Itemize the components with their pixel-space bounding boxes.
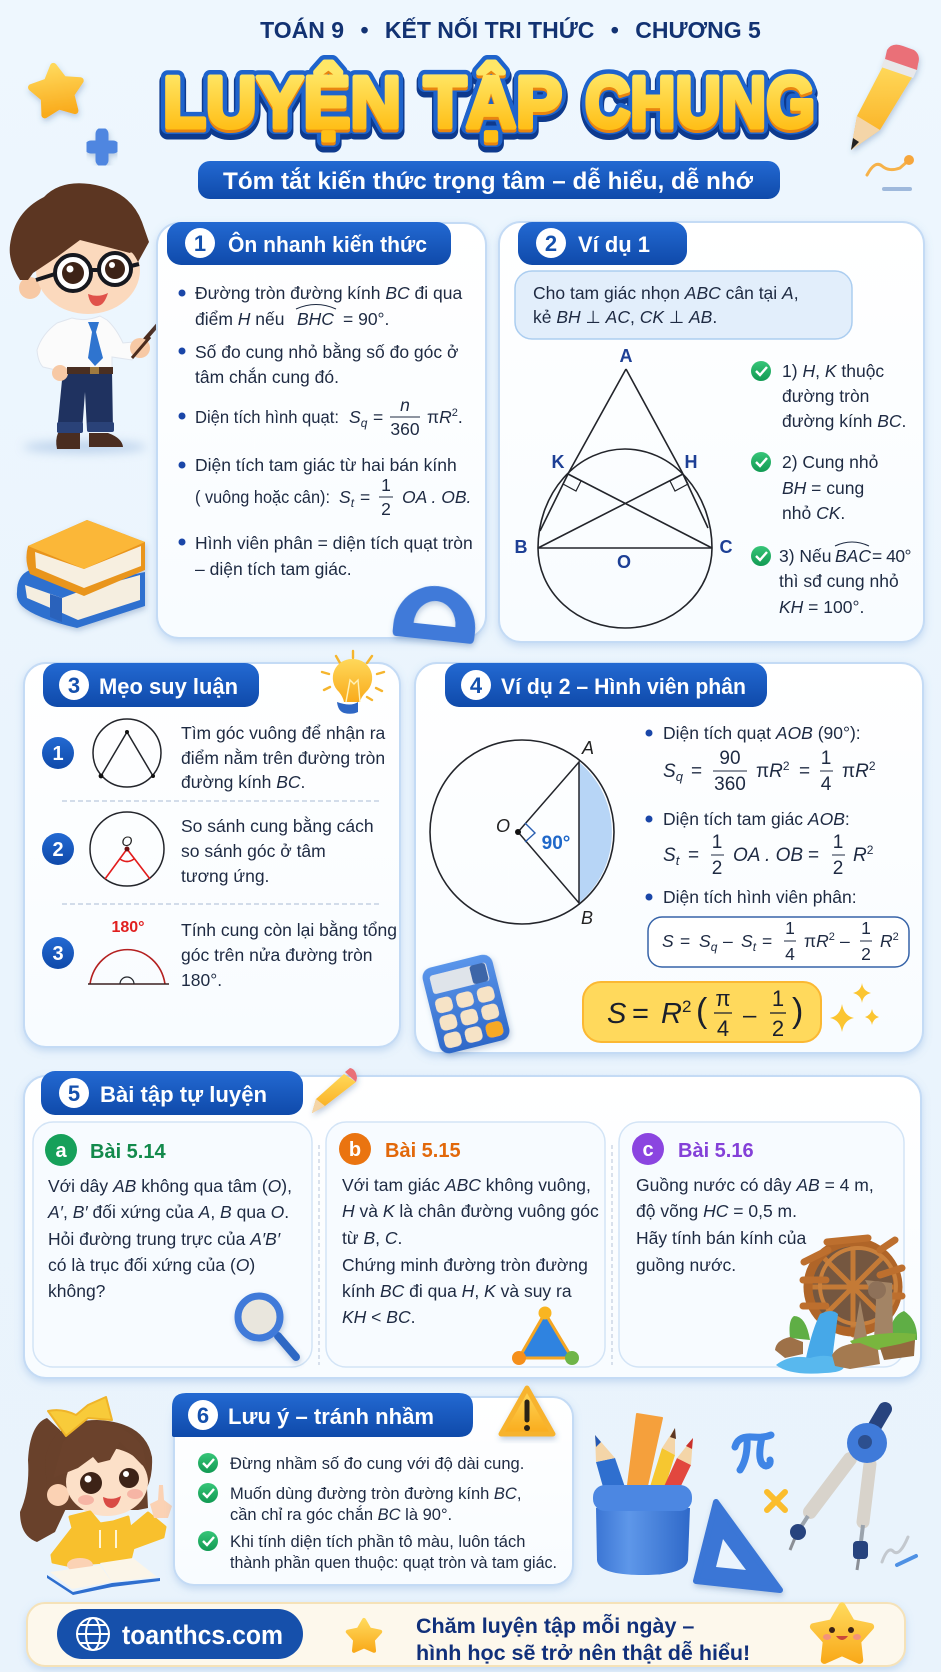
formula list: segment area: 1 [833, 832, 843, 853]
tip 1 [42, 719, 386, 792]
heading 3 [43, 663, 259, 707]
formula box: – [723, 931, 733, 951]
checklist: common mistakes: Đừng nhầm số đo cung với độ dài cung. [230, 1455, 524, 1473]
bullet list: knowledge: – diện tích tam giác. [195, 559, 352, 579]
exercise a: Bài 5.14: có là trục đối xứng của (O) [48, 1255, 255, 1275]
icon: times symbol [767, 1492, 785, 1510]
bullet list: knowledge: Đường tròn đường kính BC đi qua [195, 283, 462, 303]
formula box: S [699, 931, 711, 951]
main title: LUYỆN TẬP CHUNG: TẬP [424, 62, 562, 143]
tagline pill [198, 161, 780, 199]
formula box: 4 [785, 944, 795, 964]
bullet list: knowledge: n [400, 395, 410, 415]
checklist: example 1: thì sđ cung nhỏ [779, 571, 899, 591]
tip 3: 180°. [181, 970, 222, 990]
website badge: toanthcs.com [122, 1620, 283, 1650]
slogan: Chăm luyện tập mỗi ngày – [416, 1613, 694, 1638]
highlighted result formula: ( [696, 992, 708, 1030]
geometry figure: circular segment [430, 738, 614, 928]
tip 3: góc trên nửa đường tròn [181, 945, 373, 965]
exercise b: Bài 5.15: Chứng minh đường tròn đường [342, 1255, 588, 1275]
panel 1: Ôn nhanh kiến thức [157, 222, 486, 638]
main title: LUYỆN TẬP CHUNG: TẬP [424, 66, 562, 147]
tagline pill: Tóm tắt kiến thức trọng tâm – dễ hiểu, dễ nhớ [223, 167, 754, 195]
bullet list: knowledge: 2 [452, 407, 458, 419]
illustration: book stack [17, 520, 145, 628]
formula list: segment area: = [691, 761, 702, 782]
exercise c: Bài 5.16: Guồng nước có dây AB = 4 m, [636, 1175, 874, 1195]
tip 2: so sánh góc ở tâm [181, 841, 326, 861]
icon: calculator [420, 953, 512, 1055]
panel 6: Lưu ý – tránh nhầm [172, 1393, 573, 1585]
formula list: segment area: t [676, 853, 681, 868]
exercise c: Bài 5.16: Bài 5.16 [678, 1140, 754, 1162]
exercise a: Bài 5.14: Với dây AB không qua tâm (O), [48, 1176, 292, 1196]
main title: LUYỆN TẬP CHUNG: LUYỆN [163, 65, 401, 146]
main title: LUYỆN TẬP CHUNG: CHUNG [585, 67, 815, 147]
bullet list: knowledge: S [349, 407, 361, 427]
formula list: segment area: πR [756, 761, 783, 782]
geometry figure: circular segment: A [581, 738, 594, 758]
heading 4: 4 [470, 673, 483, 698]
formula list: segment area [646, 723, 876, 907]
icon: magnifier [238, 1296, 296, 1357]
tip 3: 3 [52, 943, 64, 965]
formula list: segment area: 2 [869, 759, 876, 773]
bullet list: knowledge: Hình viên phân = diện tích quạt tròn [195, 533, 473, 553]
bullet list: knowledge: S [339, 487, 351, 507]
main title: LUYỆN TẬP CHUNG: CHUNG [585, 63, 815, 143]
checklist: common mistakes: cần chỉ ra góc chắn BC là 90°. [230, 1505, 452, 1524]
main title: LUYỆN TẬP CHUNG: LUYỆN [163, 66, 401, 147]
formula box: – [840, 931, 850, 951]
bullet list: knowledge: 360 [390, 419, 420, 439]
exercise a: Bài 5.14: a [55, 1140, 67, 1162]
checklist: common mistakes: Muốn dùng đường tròn đường kính BC, [230, 1485, 521, 1503]
formula list: segment area: 360 [714, 774, 746, 795]
main title: LUYỆN TẬP CHUNG: TẬP [424, 62, 562, 143]
website badge [57, 1609, 303, 1659]
exercise b: Bài 5.15: b [349, 1139, 361, 1161]
geometry figure: triangle ABC in circle: O [617, 552, 631, 572]
checklist: common mistakes [198, 1453, 557, 1572]
footer banner [27, 1603, 905, 1666]
icon: small pencil [312, 1068, 357, 1113]
illustration: boy teacher with pointer [10, 183, 175, 453]
icon: plus [91, 134, 113, 160]
formula list: segment area: 2 [712, 858, 722, 879]
formula list: segment area: R [853, 845, 867, 866]
checklist: example 1: nhỏ CK. [782, 503, 845, 523]
formula box: πR [804, 931, 829, 951]
main title: LUYỆN TẬP CHUNG: LUYỆN [163, 62, 401, 143]
icon: star top left [29, 63, 84, 116]
highlighted result formula: 1 [772, 986, 784, 1011]
formula box: 1 [861, 918, 871, 938]
exercise b: Bài 5.15: Với tam giác ABC không vuông, [342, 1175, 591, 1195]
formula box: 2 [829, 931, 835, 943]
exercise a: Bài 5.14: A′, B′ đối xứng của A, B qua O. [47, 1202, 289, 1222]
bullet list: knowledge: OA . OB. [402, 487, 471, 507]
exercise c: Bài 5.16: c [642, 1139, 654, 1161]
formula list: segment area: 2 [867, 843, 874, 857]
main title: LUYỆN TẬP CHUNG: CHUNG [585, 63, 815, 143]
formula box: 2 [893, 931, 899, 943]
icon: star [348, 1620, 380, 1651]
formula box: = [762, 931, 772, 951]
tip 2 [42, 812, 374, 886]
highlighted result formula: 2 [682, 997, 691, 1016]
heading 2: Ví dụ 1 [578, 232, 650, 257]
icon: compass [790, 1409, 887, 1570]
formula list: segment area: 1 [821, 748, 831, 769]
panel 3: Mẹo suy luận [24, 663, 400, 1047]
icon: warning triangle [501, 1388, 553, 1434]
exercise b: Bài 5.15: kính BC đi qua H, K và suy ra [342, 1281, 572, 1301]
bullet list: knowledge: πR [427, 407, 452, 427]
checklist: example 1: BAC [835, 546, 871, 566]
checklist: example 1: BH = cung [782, 478, 864, 498]
tip 2: 2 [52, 839, 64, 861]
icon: squiggle top right [867, 155, 914, 189]
highlighted result formula: ) [792, 992, 803, 1030]
bullet list: knowledge: . [458, 407, 463, 427]
icon: triangle with dots [512, 1306, 579, 1365]
checklist: example 1: = 40° [872, 546, 911, 566]
tip 1: điểm nằm trên đường tròn [181, 747, 385, 768]
bullet list: knowledge: = [373, 407, 383, 427]
bullet list: knowledge [178, 283, 473, 579]
main title: LUYỆN TẬP CHUNG: LUYỆN [163, 62, 401, 143]
tip 1: 1 [52, 743, 64, 765]
bullet list: knowledge: 2 [381, 499, 391, 519]
highlighted result formula: = [632, 998, 649, 1030]
bullet list: knowledge: t [351, 496, 355, 510]
formula list: segment area: 2 [833, 858, 843, 879]
formula box: R [880, 931, 893, 951]
checklist: common mistakes: thành phần quen thuộc: quạt tròn và tam giác. [230, 1554, 557, 1572]
geometry figure: triangle ABC in circle: B [514, 537, 528, 557]
formula list: segment area: 90 [719, 748, 741, 769]
bullet list: knowledge: điểm H nếu [195, 309, 284, 329]
problem statement box: kẻ BH ⊥ AC, CK ⊥ AB. [533, 307, 717, 327]
formula box: S [741, 931, 753, 951]
icon: scribbles [882, 1537, 916, 1565]
exercise c: Bài 5.16: độ võng HC = 0,5 m. [636, 1201, 797, 1221]
tip 3 [42, 919, 397, 990]
tip 2: tương ứng. [181, 866, 269, 886]
formula box: = [680, 931, 690, 951]
formula list: segment area: S [663, 761, 676, 782]
formula box: S [662, 931, 674, 951]
formula box: q [711, 940, 718, 954]
checklist: common mistakes: Khi tính diện tích phần tô màu, luôn tách [230, 1533, 525, 1551]
formula list: segment area: OA . OB [733, 845, 803, 866]
formula box: 1 [785, 918, 795, 938]
geometry figure: circular segment: 90° [542, 833, 570, 854]
checklist: example 1: 1) H, K thuộc [782, 361, 884, 381]
icon: sparkles [830, 983, 879, 1032]
exercise c: Bài 5.16: Hãy tính bán kính của [636, 1228, 807, 1248]
heading 1: Ôn nhanh kiến thức [228, 232, 427, 257]
formula list: segment area: 1 [712, 832, 722, 853]
checklist: example 1: đường kính BC. [782, 411, 906, 431]
exercise a: Bài 5.14: Bài 5.14 [90, 1141, 166, 1163]
heading 1: 1 [194, 231, 206, 256]
formula list: segment area: q [676, 769, 684, 784]
illustration: pencil cup [593, 1414, 693, 1575]
illustration: girl reading [20, 1397, 172, 1595]
exercise a: Bài 5.14 [33, 1122, 312, 1367]
formula list: segment area: Diện tích tam giác AOB: [663, 809, 850, 829]
panel 2: Ví dụ 1 [499, 222, 924, 642]
panel 5: Bài tập tự luyện [24, 1071, 921, 1378]
bullet list: knowledge: Số đo cung nhỏ bằng số đo góc ở [195, 341, 458, 362]
formula list: segment area: πR [842, 761, 869, 782]
bullet list: knowledge: tâm chắn cung đó. [195, 366, 339, 387]
heading 4: Ví dụ 2 – Hình viên phân [501, 674, 746, 699]
formula list: segment area: 2 [783, 759, 790, 773]
tip 3: Tính cung còn lại bằng tổng [181, 919, 397, 940]
geometry figure: circular segment: O [496, 816, 510, 836]
formula box: t [753, 940, 757, 954]
checklist: example 1: KH = 100°. [779, 597, 864, 617]
slogan [416, 1613, 750, 1665]
heading 2 [518, 222, 687, 265]
geometry figure: triangle ABC in circle: H [684, 452, 698, 472]
icon: smiling star [813, 1606, 871, 1660]
exercise b: Bài 5.15: Bài 5.15 [385, 1140, 461, 1162]
heading 3: 3 [68, 673, 80, 698]
highlighted result formula: – [743, 1002, 757, 1029]
heading 5: Bài tập tự luyện [100, 1082, 267, 1107]
bullet list: knowledge: ( vuông hoặc cân): [195, 487, 330, 507]
bullet list: knowledge: q [361, 416, 368, 430]
checklist: example 1 [751, 361, 911, 617]
tip 1: Tìm góc vuông để nhận ra [181, 723, 386, 743]
tip 3: 180° [111, 919, 145, 936]
icon: light bulb [322, 651, 384, 714]
slogan: hình học sẽ trở nên thật dễ hiểu! [416, 1640, 750, 1665]
problem statement box: Cho tam giác nhọn ABC cân tại A, [533, 283, 799, 303]
highlighted result formula: S [607, 998, 627, 1030]
geometry figure: triangle ABC in circle [514, 346, 732, 628]
checklist: example 1: đường tròn [782, 386, 869, 406]
bullet list: knowledge: BHC [297, 309, 334, 329]
geometry figure: triangle ABC in circle: K [552, 452, 564, 472]
formula list: segment area: 4 [821, 774, 832, 795]
heading 5: 5 [68, 1081, 80, 1106]
heading 2: 2 [545, 231, 557, 256]
heading 1 [167, 222, 451, 265]
formula list: segment area: = [799, 761, 810, 782]
formula list: segment area: Diện tích hình viên phân: [663, 887, 857, 907]
icon: pencil top right [851, 45, 919, 150]
bullet list: knowledge: = 90°. [343, 309, 389, 329]
formula list: segment area: = [808, 845, 819, 866]
exercise b: Bài 5.15: từ B, C. [342, 1228, 402, 1248]
heading 4 [445, 663, 767, 707]
main title: LUYỆN TẬP CHUNG: TẬP [424, 65, 562, 146]
panel 4: Ví dụ 2 – Hình viên phân [20, 663, 923, 1666]
main title: LUYỆN TẬP CHUNG [163, 62, 815, 147]
illustration: water wheel [775, 1238, 917, 1374]
formula list: segment area: S [663, 845, 676, 866]
geometry figure: triangle ABC in circle: C [720, 537, 732, 557]
heading 5 [41, 1071, 303, 1115]
exercise a: Bài 5.14: không? [48, 1281, 106, 1301]
highlighted result formula: 2 [772, 1016, 784, 1041]
bullet list: knowledge: Diện tích hình quạt: [195, 407, 339, 427]
highlighted result formula: R [661, 998, 682, 1030]
formula box: 2 [861, 944, 871, 964]
top subtitle: TOÁN 9 • KẾT NỐI TRI THỨC • CHƯƠNG 5 [260, 16, 761, 43]
formula list: segment area: = [688, 845, 699, 866]
exercise a: Bài 5.14: Hỏi đường trung trực của A′B′ [48, 1229, 281, 1249]
geometry figure: circular segment: B [581, 908, 593, 928]
bullet list: knowledge: = [360, 487, 370, 507]
icon: set square [696, 1502, 780, 1590]
highlighted result formula [583, 982, 821, 1042]
heading 6: Lưu ý – tránh nhầm [228, 1404, 434, 1429]
bullet list: knowledge: 1 [381, 475, 391, 495]
bullet list: knowledge: Diện tích tam giác từ hai bán kính [195, 455, 457, 475]
exercise b: Bài 5.15 [326, 1122, 605, 1367]
icon: pi symbol [735, 1435, 771, 1470]
main title: LUYỆN TẬP CHUNG: CHUNG [585, 66, 815, 146]
exercise b: Bài 5.15: H và K là chân đường vuông góc [342, 1201, 599, 1221]
highlighted result formula: π [715, 986, 731, 1011]
exercise c: Bài 5.16 [619, 1122, 904, 1367]
exercise b: Bài 5.15: KH < BC. [342, 1307, 415, 1327]
problem statement box [515, 271, 852, 339]
heading 6 [172, 1393, 473, 1437]
checklist: example 1: 3) Nếu [779, 546, 832, 566]
tip 1: đường kính BC. [181, 772, 305, 792]
formula box [648, 917, 909, 967]
checklist: example 1: 2) Cung nhỏ [782, 452, 878, 472]
tip 2: O [122, 833, 133, 849]
geometry figure: triangle ABC in circle: A [620, 346, 632, 366]
tip 2: So sánh cung bằng cách [181, 815, 374, 836]
icon: protractor [392, 582, 479, 644]
exercise c: Bài 5.16: guồng nước. [636, 1255, 736, 1275]
heading 3: Mẹo suy luận [99, 674, 238, 699]
highlighted result formula: 4 [717, 1016, 729, 1041]
heading 6: 6 [197, 1403, 209, 1428]
formula list: segment area: Diện tích quạt AOB (90°): [663, 723, 861, 743]
